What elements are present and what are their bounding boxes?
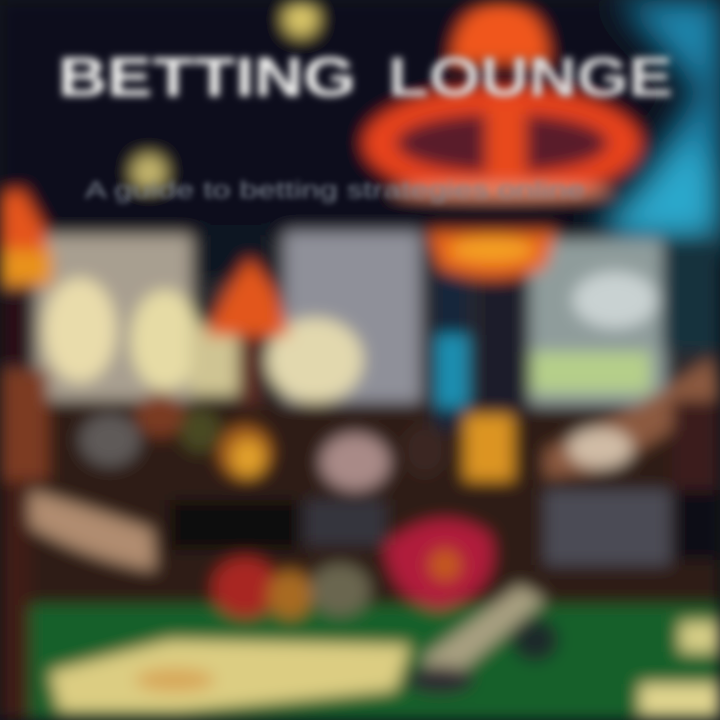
title: BETTING xyxy=(58,45,356,108)
chips / red figure xyxy=(213,520,493,619)
background: green felt xyxy=(0,605,720,720)
betting slips right xyxy=(640,622,720,716)
top dark gap between windows xyxy=(200,225,720,350)
star icon left xyxy=(132,155,166,189)
background: lower wall xyxy=(0,400,720,605)
sign: oval marquee xyxy=(364,88,640,198)
lamp: left orange shade xyxy=(0,190,52,365)
panel: centre window block xyxy=(190,232,420,402)
background: night sky xyxy=(0,0,720,240)
background: lounge wall xyxy=(0,235,720,410)
right dark figure xyxy=(672,400,720,490)
legs xyxy=(406,585,559,694)
sign: orange top cap xyxy=(452,4,548,62)
subtitle: A guide to betting strategies online xyxy=(85,177,585,204)
table felt: betting paper xyxy=(50,640,410,712)
left figure body and arm xyxy=(0,370,155,720)
central sign post xyxy=(434,270,524,430)
teal glow at upper right xyxy=(600,0,720,240)
star icon top xyxy=(284,2,318,36)
panel: left window block xyxy=(36,235,199,400)
right arm xyxy=(545,358,720,478)
title xyxy=(56,50,676,103)
sign: lower orange band xyxy=(428,232,556,278)
crowd / mid-band figures xyxy=(80,393,513,490)
title: LOUNGE xyxy=(388,45,673,108)
lamp: centre orange shade xyxy=(205,258,290,405)
table band xyxy=(170,490,720,565)
panel: right window block xyxy=(530,240,665,405)
